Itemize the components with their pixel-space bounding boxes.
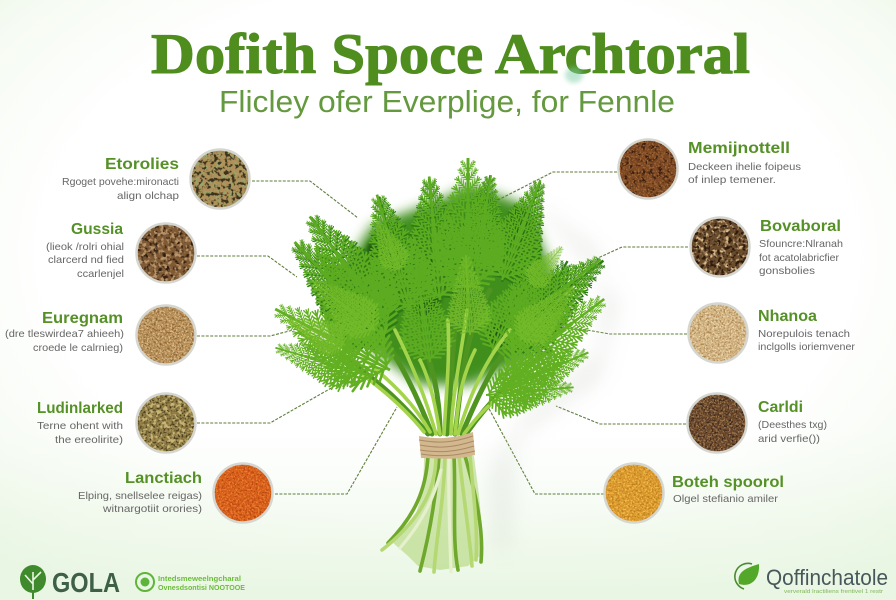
- description line 2: clarcerd nd fied: [48, 254, 124, 266]
- description: (dre tleswirdea7 ahieeh): [5, 328, 124, 340]
- fronds bright layer: [266, 158, 621, 369]
- description line 3: gonsbolies: [759, 265, 815, 277]
- lower stem mass: [392, 456, 481, 570]
- description line 2: of inlep temener.: [688, 174, 776, 186]
- description line 2: the ereolirite): [55, 434, 123, 446]
- heading: Euregnam: [42, 310, 123, 327]
- item: Bovaboral: [690, 218, 843, 277]
- description: Olgel stefianio amiler: [673, 493, 779, 505]
- description line 2: witnargotiit orories): [102, 503, 202, 515]
- connector lines: [197, 172, 688, 494]
- icon: tree: [20, 565, 46, 599]
- description: Norepulois tenach: [758, 328, 850, 340]
- heading: Boteh spoorol: [672, 474, 784, 491]
- wordmark: GOLA: [52, 567, 120, 598]
- logo: secondary badge: [136, 573, 245, 592]
- badge text line 1: Intedsmeweelngcharal: [158, 574, 241, 583]
- description: Sfouncre:Nlranah: [759, 238, 843, 250]
- heading: Bovaboral: [760, 218, 841, 235]
- icon: badge: [136, 573, 154, 591]
- heading: Carldi: [758, 399, 803, 416]
- twine tie: [419, 432, 475, 459]
- item: Ludinlarked: [37, 394, 196, 452]
- subtitle: Flicley ofer Everplige, for Fennle: [219, 84, 675, 119]
- spice bowl: [190, 150, 250, 208]
- stem highlights: [290, 310, 540, 434]
- title: Dofith Spoce Archtoral: [151, 23, 750, 86]
- spice bowl: [688, 304, 748, 362]
- title smudge: [565, 67, 583, 83]
- item: Gussia: [46, 221, 196, 282]
- wordmark: Qoffinchatole: [766, 565, 888, 590]
- item: Memijnottell: [618, 140, 801, 198]
- description line 2: croede le calrnieg): [33, 342, 123, 354]
- item: Etorolies: [62, 150, 250, 208]
- fronds dark layer: [267, 171, 624, 371]
- item: Nhanoa: [688, 304, 856, 362]
- item: Euregnam: [5, 306, 196, 364]
- heading: Gussia: [71, 221, 123, 238]
- lower stems: [382, 456, 482, 572]
- logo: GOLA: [20, 565, 120, 599]
- item: Boteh spoorol: [604, 464, 784, 522]
- spice bowl: [688, 394, 746, 452]
- description: (lieok /rolri ohial: [46, 241, 124, 253]
- heading: Lanctiach: [125, 470, 202, 487]
- tagline: ververald lractiliens frentivel 1 restr: [784, 589, 883, 595]
- foliage shadow dark patches: [366, 207, 532, 347]
- upper stems: [300, 280, 550, 434]
- description: (Deesthes txg): [758, 419, 827, 431]
- description line 2: inclgolls ioriemvener: [758, 341, 856, 353]
- heading: Ludinlarked: [37, 400, 123, 417]
- description: Deckeen ihelie foipeus: [688, 161, 801, 173]
- spice bowl: [618, 140, 678, 198]
- spice bowl: [690, 218, 750, 276]
- spice bowl: [136, 224, 196, 282]
- item: Carldi: [688, 394, 827, 452]
- heading: Etorolies: [105, 156, 179, 173]
- spice bowl: [214, 464, 272, 522]
- description line 3: ccarlenjel: [77, 268, 124, 280]
- description line 2: align olchap: [117, 190, 179, 202]
- heading: Nhanoa: [758, 308, 817, 325]
- logo: Qoffinchatole: [735, 563, 888, 595]
- description: Elping, snellselee reigas): [78, 490, 202, 502]
- fronds lower layer: [257, 271, 625, 421]
- spice bowl: [604, 464, 664, 522]
- spice bowl: [136, 394, 196, 452]
- spice bowl: [136, 306, 196, 364]
- plant shadow: [490, 190, 620, 550]
- heading: Memijnottell: [688, 140, 790, 157]
- lower background glow: [0, 430, 896, 600]
- fennel bunch illustration: [257, 158, 625, 572]
- icon: leaf ring: [735, 563, 759, 589]
- description: Terne ohent with: [37, 420, 123, 432]
- item: Lanctiach: [78, 464, 272, 522]
- badge text line 2: Ovnesdsontisi NOOTOOE: [158, 583, 245, 592]
- foliage base: [330, 185, 565, 385]
- description line 2: fot acatolabricfier: [759, 252, 839, 264]
- description line 2: arid verfie()): [758, 433, 820, 445]
- fronds highlight layer: [281, 213, 589, 362]
- description: Rgoget povehe:mironacti: [62, 176, 179, 188]
